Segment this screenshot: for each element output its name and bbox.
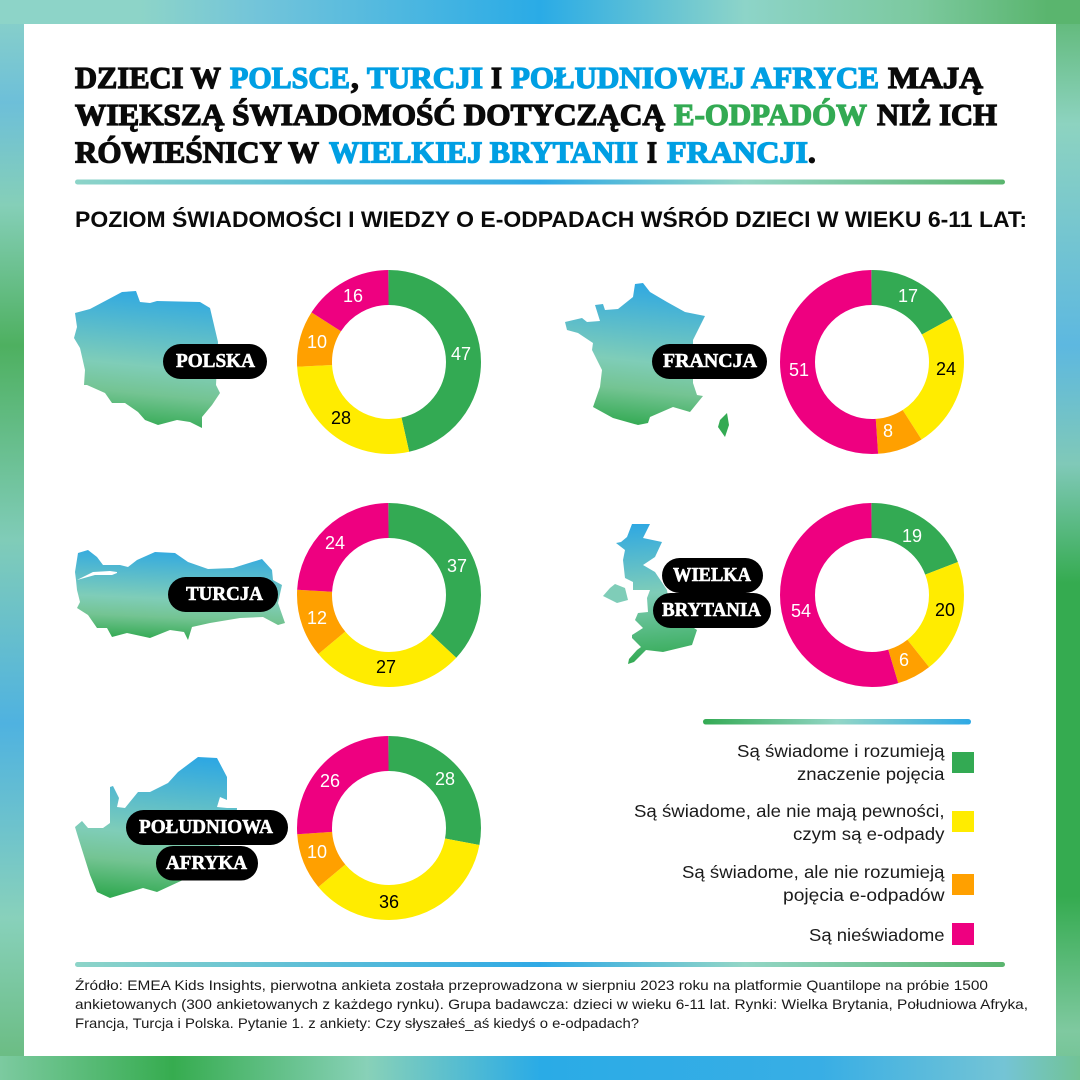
panel: Turcja: [75, 520, 467, 677]
donut chart: Turcja: 24: [325, 533, 345, 553]
title: .: [808, 134, 816, 170]
map: Francja: [565, 283, 729, 437]
donut chart: Turcja: 12: [307, 608, 327, 628]
panel: Wielka Brytania: [603, 520, 955, 670]
legend item: aware but unsure: [634, 801, 974, 844]
source note: Francja, Turcja i Polska. Pytanie 1. z ankiety: Czy słyszałeś_aś kiedyś o e-odpadach?: [75, 1015, 639, 1031]
donut chart: Wielka Brytania: 6: [899, 650, 909, 670]
label: Południowa Afryka: AFRYKA: [166, 852, 248, 874]
source note: [75, 977, 1028, 1031]
donut chart: Francja: 8: [883, 421, 893, 441]
donut chart: Polska: 47: [451, 344, 471, 364]
donut chart: Południowa Afryka: 10: [307, 842, 327, 862]
title: DZIECI W: [75, 60, 221, 95]
label: Turcja: [168, 577, 278, 612]
donut chart: Polska: 28: [331, 408, 351, 428]
title: WIELKIEJ BRYTANII: [329, 134, 638, 170]
donut chart: Francja: [789, 286, 956, 441]
panel: Francja: [565, 283, 956, 441]
legend item: unaware: Są nieświadome: [809, 925, 944, 945]
label: Francja: FRANCJA: [663, 350, 758, 372]
subtitle: POZIOM ŚWIADOMOŚCI I WIEDZY O E-ODPADACH WŚRÓD DZIECI W WIEKU 6-11 LAT:: [75, 207, 1027, 232]
source note: ankietowanych (300 ankietowanych z każdego rynku). Grupa badawcza: dzieci w wieku 6-11 lat. Rynki: Wielka Brytania, Południowa Afryka,: [75, 996, 1028, 1012]
label: Turcja: TURCJA: [186, 583, 264, 605]
map: Wielka Brytania: [603, 524, 697, 664]
legend item: aware and understand: [737, 741, 974, 784]
donut chart: Francja: 51: [789, 360, 809, 380]
legend item: aware and understand: znaczenie pojęcia: [797, 764, 945, 784]
donut chart: Turcja: [307, 520, 467, 677]
panel: Polska: [74, 286, 471, 436]
donut chart: Południowa Afryka: [307, 754, 464, 912]
donut chart: Wielka Brytania: 54: [791, 601, 811, 621]
label: Francja: [652, 344, 767, 379]
donut chart: Wielka Brytania: 20: [935, 600, 955, 620]
label: Polska: POLSKA: [176, 350, 256, 372]
map: Południowa Afryka: [75, 757, 237, 898]
legend item: aware and understand: Są świadome i rozumieją: [737, 741, 945, 761]
title: I: [491, 60, 502, 95]
donut chart: Turcja: 37: [447, 556, 467, 576]
title: TURCJI: [367, 60, 483, 95]
donut chart: Turcja: 27: [376, 657, 396, 677]
donut chart: Polska: 10: [307, 332, 327, 352]
title: I: [647, 134, 657, 170]
title: MAJĄ: [888, 60, 984, 95]
legend item: aware but do not understand: Są świadome, ale nie rozumieją: [682, 862, 945, 882]
title: WIĘKSZĄ ŚWIADOMOŚĆ DOTYCZĄCĄ: [75, 97, 666, 132]
panel: Południowa Afryka: [75, 754, 464, 912]
title: [75, 60, 997, 170]
donut chart: Francja: 24: [936, 359, 956, 379]
title: POŁUDNIOWEJ AFRYCE: [511, 60, 879, 95]
label: Wielka Brytania: WIELKA: [673, 564, 752, 586]
legend item: aware but unsure: Są świadome, ale nie mają pewności,: [634, 801, 944, 821]
donut chart: Południowa Afryka: 26: [320, 771, 340, 791]
donut chart: Południowa Afryka: 36: [379, 892, 399, 912]
label: Wielka Brytania: [653, 558, 771, 628]
legend item: aware but do not understand: [682, 862, 974, 905]
donut chart: Francja: 17: [898, 286, 918, 306]
legend: [634, 719, 974, 945]
title: ,: [351, 60, 359, 95]
title: FRANCJI: [667, 134, 808, 170]
legend item: aware but do not understand: pojęcia e-odpadów: [783, 885, 945, 905]
label: Południowa Afryka: [126, 810, 288, 880]
donut chart: Wielka Brytania: 19: [902, 526, 922, 546]
donut chart: Wielka Brytania: [791, 520, 955, 670]
title: E-ODPADÓW: [674, 97, 867, 132]
label: Południowa Afryka: POŁUDNIOWA: [139, 816, 274, 838]
title: RÓWIEŚNICY W: [75, 134, 319, 170]
map: Polska: [74, 291, 220, 428]
title: NIŻ ICH: [877, 97, 997, 132]
donut chart: Południowa Afryka: 28: [435, 769, 455, 789]
legend item: aware but unsure: czym są e-odpady: [793, 824, 945, 844]
map: Turcja: [75, 550, 285, 640]
title: POLSCE: [230, 60, 350, 95]
donut chart: Polska: 16: [343, 286, 363, 306]
label: Wielka Brytania: BRYTANIA: [662, 599, 762, 621]
label: Polska: [163, 344, 267, 379]
source note: Źródło: EMEA Kids Insights, pierwotna ankieta została przeprowadzona w sierpniu 2023 roku na platformie Quantilope na próbie 1500: [75, 977, 988, 993]
donut chart: Polska: [307, 286, 471, 436]
